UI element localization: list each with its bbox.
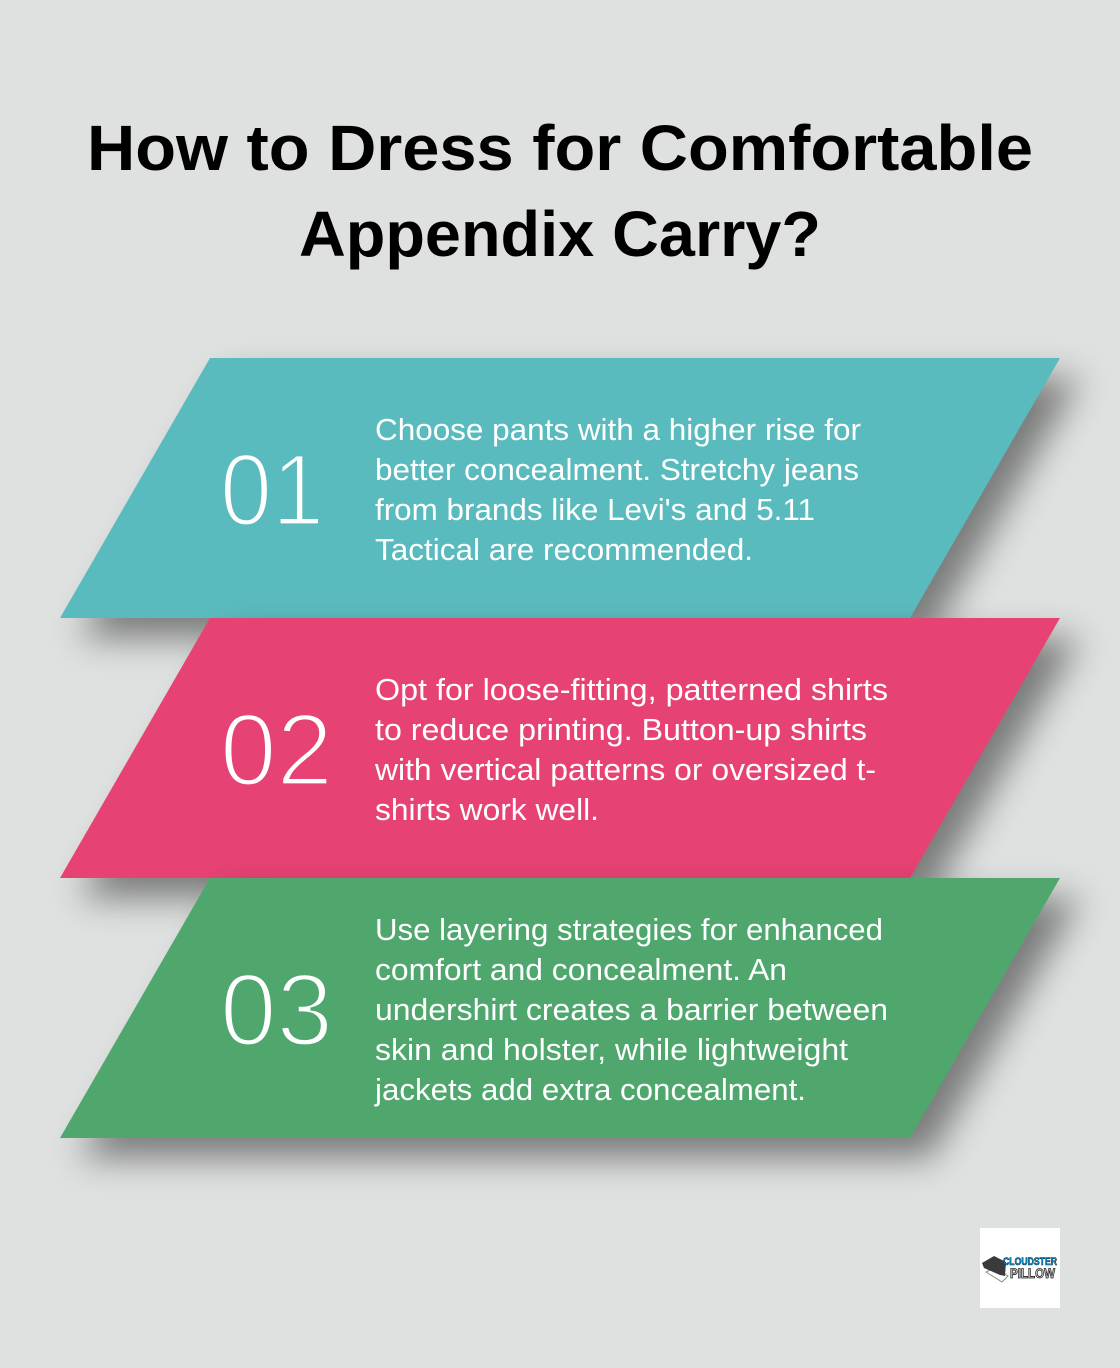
logo: Cloudster Pillow: PILLOW xyxy=(1010,1266,1055,1281)
step 01 text xyxy=(375,413,861,567)
step 01 text: from brands like Levi's and 5.11 xyxy=(375,493,815,527)
title: Appendix Carry? xyxy=(299,198,821,270)
step 01 text: Choose pants with a higher rise for xyxy=(375,413,861,447)
number 03: 03 xyxy=(220,953,333,1067)
step 01 text: Tactical are recommended. xyxy=(375,533,753,567)
step 03 text: Use layering strategies for enhanced xyxy=(375,913,883,947)
panel: step 01 xyxy=(60,358,1060,618)
logo: Cloudster Pillow xyxy=(980,1228,1060,1308)
step 02 text: to reduce printing. Button-up shirts xyxy=(375,713,867,747)
step 03 text xyxy=(374,913,888,1107)
teal parallelogram xyxy=(60,358,1060,618)
number 01: 01 xyxy=(220,433,324,547)
icon: pillow xyxy=(982,1256,1008,1282)
step 02 text xyxy=(374,673,888,827)
step 02 text: Opt for loose-fitting, patterned shirts xyxy=(375,673,888,707)
title: How to Dress for Comfortable xyxy=(87,112,1033,184)
step 01 text: better concealment. Stretchy jeans xyxy=(375,453,859,487)
panel: step 02 xyxy=(60,618,1060,878)
step 03 text: jackets add extra concealment. xyxy=(374,1073,806,1107)
step 03 text: comfort and concealment. An xyxy=(375,953,787,987)
title xyxy=(87,112,1033,270)
panel: step 03 xyxy=(60,878,1060,1138)
number 02: 02 xyxy=(220,693,333,807)
step 03 text: skin and holster, while lightweight xyxy=(375,1033,849,1067)
step 03 text: undershirt creates a barrier between xyxy=(375,993,888,1027)
logo: Cloudster Pillow: CLOUDSTER xyxy=(1003,1256,1057,1268)
step 02 text: with vertical patterns or oversized t- xyxy=(374,753,876,787)
step 02 text: shirts work well. xyxy=(375,793,599,827)
pink parallelogram xyxy=(60,618,1060,878)
green parallelogram xyxy=(60,878,1060,1138)
